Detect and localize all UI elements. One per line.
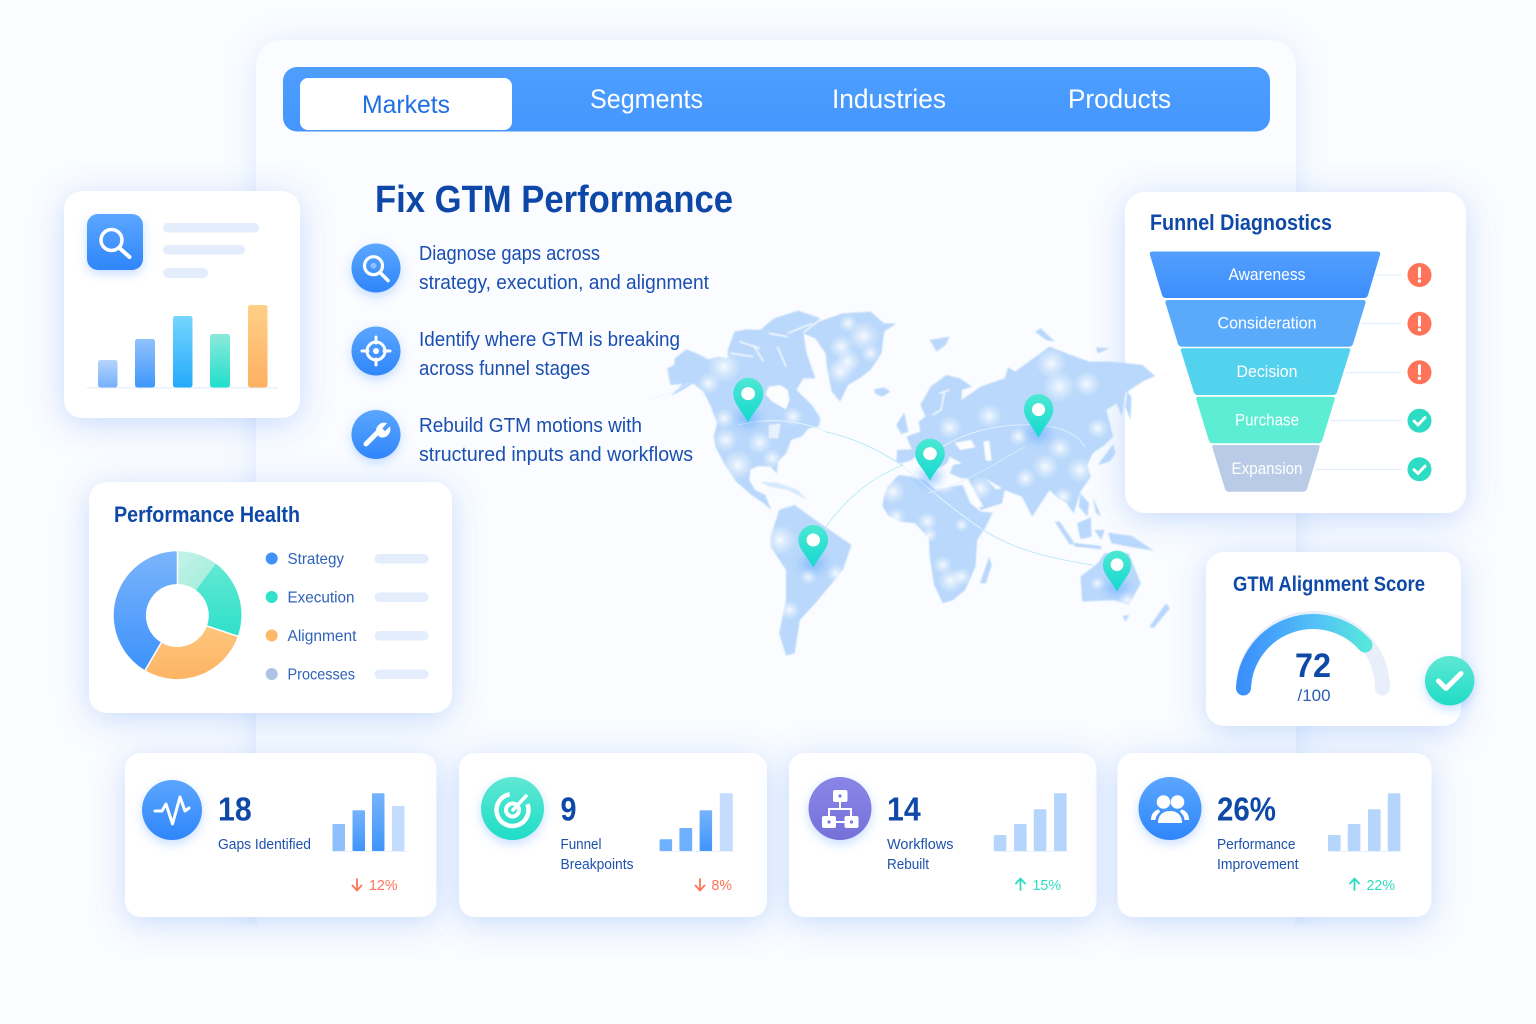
map glow spots bbox=[697, 314, 1137, 620]
funnel: Expansion bbox=[1212, 445, 1320, 492]
label bbox=[560, 837, 634, 873]
world map bbox=[650, 311, 1170, 656]
stat card: workflows rebuilt bbox=[789, 753, 1096, 917]
funnel: Consideration: Consideration bbox=[1218, 314, 1316, 332]
value: 18 bbox=[218, 790, 252, 828]
score value: 72 bbox=[1295, 647, 1331, 685]
mini bars bbox=[332, 793, 408, 852]
icon: magnifier bbox=[352, 244, 400, 292]
status: ok Purchase bbox=[1408, 409, 1432, 433]
label: Performance bbox=[1217, 837, 1296, 853]
map pin: North America bbox=[733, 378, 763, 427]
map seas and bays bbox=[765, 385, 1002, 507]
icon: people bbox=[1138, 777, 1202, 840]
funnel: Purchase bbox=[1196, 397, 1335, 443]
score value bbox=[1295, 647, 1331, 705]
panel: performance health bbox=[89, 482, 452, 713]
bullet: diagnose gaps bbox=[352, 243, 709, 294]
tab bar bbox=[283, 67, 1270, 132]
connector lines bbox=[1315, 275, 1401, 470]
status: ok Expansion bbox=[1408, 457, 1432, 481]
text block: structured inputs and workflows bbox=[419, 444, 693, 466]
icon: pulse bbox=[142, 780, 202, 840]
icon: wrench bbox=[352, 410, 400, 459]
status: alert Awareness bbox=[1408, 263, 1432, 287]
funnel: Decision bbox=[1181, 348, 1350, 395]
stat card: funnel breakpoints bbox=[459, 753, 767, 917]
legend: Processes bbox=[288, 666, 355, 684]
label: Breakpoints bbox=[560, 857, 634, 873]
map pin: Europe bbox=[915, 439, 945, 485]
legend bbox=[266, 551, 428, 684]
placeholder lines bbox=[163, 223, 259, 278]
label: Rebuilt bbox=[887, 857, 929, 873]
status: alert Decision bbox=[1408, 360, 1432, 384]
legend: Strategy bbox=[288, 551, 344, 568]
delta bbox=[1016, 877, 1061, 894]
text block bbox=[419, 329, 680, 380]
tab: Industries: Industries bbox=[832, 84, 946, 114]
tab: Products: Products bbox=[1068, 84, 1171, 114]
icon: target bbox=[481, 777, 544, 840]
funnel: Purchase: Purchase bbox=[1235, 412, 1299, 430]
score value: /100 bbox=[1298, 686, 1330, 705]
text block: strategy, execution, and alignment bbox=[419, 272, 709, 294]
mini bars bbox=[660, 793, 734, 852]
label bbox=[1217, 837, 1298, 873]
label bbox=[887, 837, 954, 873]
delta: 12% bbox=[369, 877, 398, 894]
icon: search bbox=[87, 214, 143, 270]
bar chart bbox=[87, 305, 278, 388]
icon: check badge bbox=[1425, 656, 1474, 705]
text block: Identify where GTM is breaking bbox=[419, 329, 680, 351]
heading: GTM Alignment Score bbox=[1233, 573, 1425, 596]
text block bbox=[419, 243, 709, 294]
title: Fix GTM Performance bbox=[375, 179, 733, 221]
text block: across funnel stages bbox=[419, 358, 590, 380]
active tab: Markets bbox=[300, 78, 512, 130]
panel: GTM alignment score bbox=[1206, 552, 1474, 726]
bullet: identify breaks bbox=[352, 326, 680, 380]
active tab: Markets: Markets bbox=[362, 91, 450, 119]
stat card: performance improvement bbox=[1118, 753, 1432, 917]
legend: Execution bbox=[288, 590, 354, 606]
funnel: Decision: Decision bbox=[1236, 363, 1298, 381]
bullet: rebuild motions bbox=[352, 410, 693, 466]
delta: 8% bbox=[712, 877, 732, 894]
funnel: Awareness: Awareness bbox=[1228, 266, 1306, 284]
icon: workflow bbox=[808, 777, 872, 840]
text block bbox=[419, 415, 693, 466]
delta bbox=[352, 877, 398, 894]
gauge bbox=[1244, 618, 1382, 688]
label: Gaps Identified bbox=[218, 837, 311, 853]
delta: 22% bbox=[1366, 877, 1395, 894]
heading: Funnel Diagnostics bbox=[1150, 210, 1332, 235]
heading: Performance Health bbox=[114, 502, 300, 527]
label: Funnel bbox=[560, 837, 602, 853]
text block: Rebuild GTM motions with bbox=[419, 415, 642, 437]
text block: Diagnose gaps across bbox=[419, 243, 600, 265]
mini bars bbox=[994, 793, 1069, 852]
map pin: South America bbox=[798, 525, 828, 572]
route arcs bbox=[650, 383, 1093, 565]
donut chart bbox=[114, 551, 241, 679]
delta bbox=[1350, 877, 1395, 894]
delta bbox=[696, 877, 732, 894]
mini bars bbox=[1328, 793, 1403, 852]
label: Improvement bbox=[1217, 857, 1298, 873]
legend: Alignment bbox=[288, 628, 357, 645]
funnel: Expansion: Expansion bbox=[1232, 460, 1302, 478]
label: Workflows bbox=[887, 837, 954, 853]
stat card: gaps identified bbox=[125, 753, 436, 917]
map pin: Australia bbox=[1103, 551, 1131, 595]
value: 26% bbox=[1217, 790, 1276, 828]
status: alert Consideration bbox=[1408, 312, 1432, 336]
funnel: Consideration bbox=[1165, 300, 1366, 347]
value: 9 bbox=[560, 790, 576, 828]
tab: Segments: Segments bbox=[590, 84, 703, 114]
map pin: Asia bbox=[1024, 394, 1053, 442]
value: 14 bbox=[887, 790, 921, 828]
icon: crosshair bbox=[352, 326, 400, 376]
panel: funnel diagnostics bbox=[1125, 192, 1466, 513]
funnel: Awareness bbox=[1150, 252, 1380, 298]
delta: 15% bbox=[1032, 877, 1061, 894]
panel: search and bar chart card bbox=[64, 191, 300, 418]
